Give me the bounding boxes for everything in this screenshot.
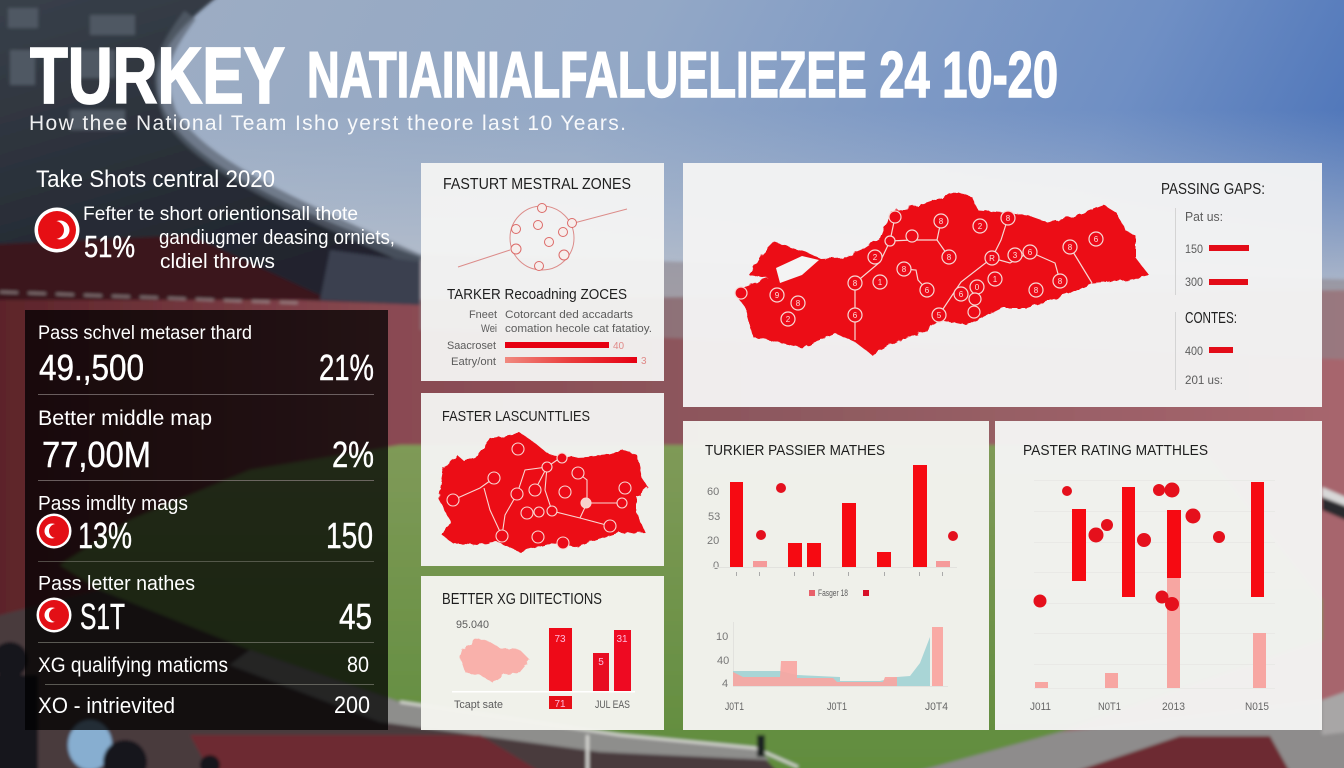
stat row: pass letter: 45 xyxy=(339,596,372,637)
stat row: better middle map: 77,00M xyxy=(42,434,151,475)
stat row: pass schvel: 49.,500 xyxy=(39,347,144,388)
legend: passing gaps: 150 xyxy=(1185,242,1203,256)
area chart: trend: J0T1 xyxy=(827,701,847,713)
map: turkey: 8 xyxy=(1058,277,1063,286)
stat row: pass imdlty: Pass imdlty mags xyxy=(38,493,188,515)
chart: bars and dots: N015 xyxy=(1245,701,1269,713)
bar: saacroset: 40 xyxy=(613,341,625,352)
legend: fasger 18 xyxy=(809,588,869,598)
legend: passing gaps: 400 xyxy=(1185,344,1203,358)
bar: saacroset xyxy=(447,340,625,352)
bar chart: xg: 71 xyxy=(554,699,566,710)
panel: zones xyxy=(421,163,664,381)
map: turkey: 6 xyxy=(1028,248,1033,257)
bar: eatry/ont: 3 xyxy=(641,356,647,367)
bar chart: passier: 20 xyxy=(707,535,719,547)
map: pale silhouette: 95.040 xyxy=(456,619,489,631)
map: pale silhouette xyxy=(454,619,530,711)
map: turkey: 0 xyxy=(975,283,980,292)
stat row: xo intrievited: 200 xyxy=(334,692,370,719)
bar chart: xg xyxy=(452,628,635,711)
icon: crescent badge xyxy=(34,208,80,252)
stat row: xo intrievited xyxy=(38,692,370,719)
panel: turkier passier mathes xyxy=(683,421,989,730)
stat row: pass letter: Pass letter nathes xyxy=(38,573,195,595)
map: turkey xyxy=(735,192,1149,355)
stat row: pass letter xyxy=(36,573,374,643)
map: turkey: 8 xyxy=(1068,243,1073,252)
callout: take shots: Fefter te short orientionsall thote xyxy=(83,204,358,225)
stat row: xg qualifying xyxy=(38,652,374,685)
text block: zone description: comation hecole cat fatatioy. xyxy=(505,323,652,335)
map: turkey: 8 xyxy=(796,299,801,308)
chart: bars and dots xyxy=(1030,480,1275,713)
heading: faster lascuntties: FASTER LASCUNTTLIES xyxy=(442,408,590,425)
map: turkey: 8 xyxy=(947,253,952,262)
map: turkey: 8 xyxy=(1034,286,1039,295)
stat row: better middle map: Better middle map xyxy=(38,407,212,430)
legend: passing gaps: 300 xyxy=(1185,275,1203,289)
chart: bars and dots: J011 xyxy=(1030,701,1051,713)
legend: passing gaps: 201 us: xyxy=(1185,373,1223,387)
map: turkey: 6 xyxy=(1094,235,1099,244)
map: turkey: 8 xyxy=(853,279,858,288)
icon: crescent badge xyxy=(36,514,72,548)
legend: passing gaps: PASSING GAPS: xyxy=(1161,181,1265,198)
stat row: pass letter: S1T xyxy=(80,596,125,637)
bar chart: passier xyxy=(707,465,958,576)
text block: zone description: Fneet xyxy=(469,309,497,321)
legend: passing gaps: CONTES: xyxy=(1185,310,1237,327)
area chart: trend: J0T4 xyxy=(925,701,948,713)
map: turkey: 6 xyxy=(959,290,964,299)
callout: take shots: cldiel throws xyxy=(160,251,275,273)
bar chart: xg: 73 xyxy=(554,634,566,645)
bar: saacroset: Saacroset xyxy=(447,340,496,352)
callout: take shots: gandiugmer deasing orniets, xyxy=(159,227,395,249)
legend: fasger 18: Fasger 18 xyxy=(818,588,848,598)
bar chart: passier: 0 xyxy=(713,560,719,572)
bar: eatry/ont xyxy=(451,356,647,368)
map: turkey: 3 xyxy=(1013,251,1018,260)
panel: paster rating matthles xyxy=(995,421,1322,730)
text block: zone description xyxy=(469,309,652,335)
map: turkey: 2 xyxy=(978,222,983,231)
panel: dark statistics xyxy=(25,310,388,730)
stat row: pass schvel: 21% xyxy=(319,347,374,388)
stat row: xo intrievited: XO - intrievited xyxy=(38,693,175,718)
text block: zone description: Cotorcant ded accadarts xyxy=(505,309,634,321)
bar chart: xg: 31 xyxy=(616,634,628,645)
heading: fasturt mestral zones: FASTURT MESTRAL ZONES xyxy=(443,176,631,193)
map: turkey: 2 xyxy=(786,315,791,324)
map: turkey: 5 xyxy=(937,311,942,320)
chart: bars and dots: N0T1 xyxy=(1098,701,1121,713)
heading: better xg dittections: BETTER XG DIITECTIONS xyxy=(442,591,602,608)
heading: turkier passier mathes: TURKIER PASSIER MATHES xyxy=(705,442,885,459)
map: turkey: 1 xyxy=(878,278,883,287)
title xyxy=(30,31,1058,120)
bar chart: xg: 5 xyxy=(598,657,604,668)
stat row: xg qualifying: XG qualifying maticms xyxy=(38,654,228,677)
stat row: better middle map xyxy=(38,407,374,481)
stat row: pass imdlty xyxy=(36,493,374,562)
diagram: zone circle xyxy=(458,204,627,270)
title: TURKEY xyxy=(30,31,285,120)
map: turkey: 8 xyxy=(939,217,944,226)
stat row: better middle map: 2% xyxy=(332,434,374,475)
legend: passing gaps: Pat us: xyxy=(1185,209,1223,224)
panel: faster lascuntties map xyxy=(421,393,664,566)
icon: crescent badge xyxy=(36,598,72,632)
bar: eatry/ont: Eatry/ont xyxy=(451,356,496,368)
heading: recoadning zoces: TARKER Recoadning ZOCES xyxy=(447,286,627,303)
subtitle: How thee National Team Isho yerst theore last 10 Years. xyxy=(29,112,626,135)
map: turkey: 1 xyxy=(993,275,998,284)
stat row: pass schvel xyxy=(38,323,374,395)
chart: bars and dots: 2013 xyxy=(1162,701,1185,713)
callout: take shots xyxy=(34,166,395,273)
stat row: pass imdlty: 150 xyxy=(326,515,373,556)
map: turkey: 8 xyxy=(902,265,907,274)
text block: zone description: Wei xyxy=(481,323,497,335)
area chart: trend: 40 xyxy=(717,655,729,667)
legend: passing gaps xyxy=(1161,181,1265,390)
map: turkey: 6 xyxy=(853,311,858,320)
map: pale silhouette: Tcapt sate xyxy=(454,699,503,711)
map: turkey: 2 xyxy=(873,253,878,262)
heading: paster rating matthles: PASTER RATING MATTHLES xyxy=(1023,442,1208,459)
area chart: trend xyxy=(716,622,948,713)
area chart: trend: J0T1 xyxy=(725,701,744,713)
map: turkey: R xyxy=(989,254,995,263)
area chart: trend: 10 xyxy=(716,631,728,643)
bar chart: passier: 60 xyxy=(707,486,719,498)
map: turkey regions xyxy=(438,433,648,552)
bar chart: passier: 53 xyxy=(708,511,720,523)
map: turkey: 9 xyxy=(775,291,780,300)
panel: better xg directions xyxy=(421,576,664,730)
map: turkey: 6 xyxy=(925,286,930,295)
stat row: pass imdlty: 13% xyxy=(78,515,132,556)
stat row: xg qualifying: 80 xyxy=(347,652,369,677)
map: turkey: 8 xyxy=(1006,214,1011,223)
bar chart: xg: JUL EAS xyxy=(595,699,630,711)
callout: take shots: 51% xyxy=(84,229,135,264)
stat row: pass schvel: Pass schvel metaser thard xyxy=(38,323,252,344)
area chart: trend: 4 xyxy=(722,678,728,690)
panel: main map and passing gaps xyxy=(683,163,1322,407)
callout: take shots: Take Shots central 2020 xyxy=(36,166,275,193)
